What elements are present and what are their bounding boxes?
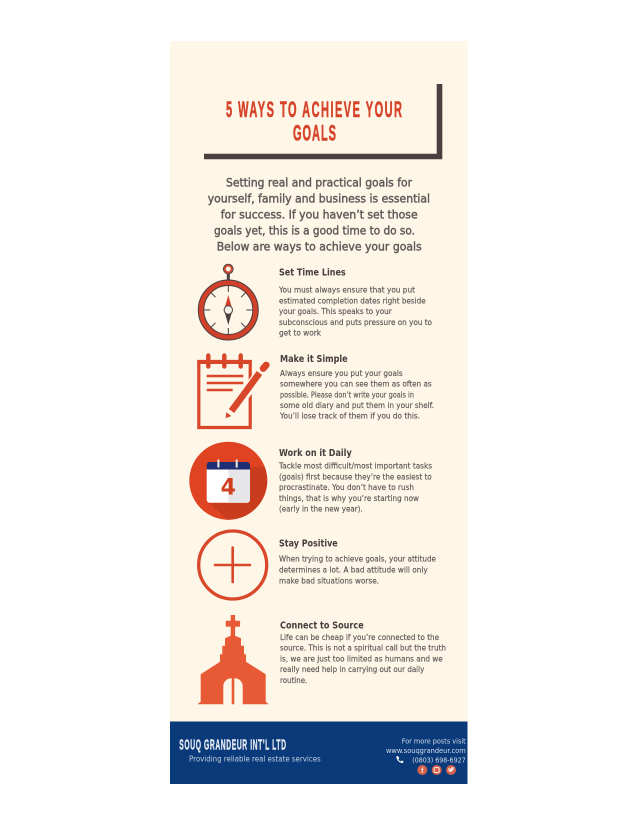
body text: subconscious and puts pressure on you to (279, 318, 432, 327)
intro paragraph: Setting real and practical goals for (226, 176, 412, 190)
corner bracket (204, 84, 442, 159)
body text: somewhere you can see them as often as (280, 380, 432, 389)
icon: compass stopwatch (198, 264, 258, 340)
body text: things, that is why you’re starting now (279, 494, 419, 503)
section: Work on it Daily (278, 448, 432, 514)
section: Stay Positive (279, 539, 436, 585)
icon: phone (396, 756, 404, 763)
body text: source. This is not a spiritual call but the truth (280, 644, 446, 653)
heading: Connect to Source (280, 621, 364, 632)
heading: Work on it Daily (279, 448, 352, 459)
body text: determines a lot. A bad attitude will only (279, 565, 428, 574)
body text: possible. Please don’t write your goals in (280, 390, 414, 399)
body text: some old diary and put them in your shelf. (280, 401, 434, 410)
body text: routine. (280, 676, 307, 685)
body text: When trying to achieve goals, your attitude (279, 555, 436, 564)
body text (278, 461, 432, 514)
social icons: f (421, 766, 424, 775)
body text: estimated completion dates right beside (279, 296, 426, 305)
icon: notepad and pencil (197, 356, 266, 428)
body text: make bad situations worse. (279, 576, 379, 585)
body text: You’ll lose track of them if you do this. (279, 412, 420, 421)
body text: procrastinate. You don’t have to rush (279, 483, 414, 492)
body text: your goals. This speaks to your (279, 307, 392, 316)
body text (278, 286, 432, 338)
company name: SOUQ GRANDEUR INT'L LTD (179, 736, 286, 753)
title second line: GOALS (293, 120, 336, 146)
contact text (386, 736, 466, 764)
body text (279, 369, 434, 421)
title block with corner bracket (204, 84, 442, 159)
icon: church (197, 615, 269, 704)
panel: cream page background (170, 41, 468, 722)
body text: Life can be cheap if you’re connected to the (280, 633, 439, 642)
intro paragraph: yourself, family and business is essential (208, 191, 430, 205)
intro paragraph: for success. If you haven’t set those (221, 207, 418, 221)
heading: Set Time Lines (279, 268, 346, 279)
heading: Stay Positive (279, 539, 338, 550)
body text: is, we are just too limited as humans and we (280, 654, 443, 663)
body text: You must always ensure that you put (278, 286, 415, 295)
social icons (417, 765, 456, 775)
section: Connect to Source (280, 621, 446, 685)
body text: really need help in carrying out our daily (280, 665, 425, 674)
title: 5 WAYS TO ACHIEVE YOUR (226, 97, 402, 122)
tagline: Providing reliable real estate services (189, 755, 321, 764)
footer background (170, 722, 468, 784)
contact text: www.souqgrandeur.com (386, 746, 466, 755)
body text: get to work (279, 329, 322, 338)
icon: plus in circle (199, 531, 267, 599)
contact text: (0803) 698-6927 (412, 755, 466, 764)
icon: calendar badge (189, 442, 267, 520)
body text: (goals) first because they’re the easiest to (279, 472, 432, 481)
intro paragraph: goals yet, this is a good time to do so. (214, 223, 415, 237)
body text: Always ensure you put your goals (280, 369, 403, 378)
heading: Make it Simple (280, 354, 348, 365)
contact text: For more posts visit (402, 736, 466, 745)
intro paragraph: Below are ways to achieve your goals (217, 239, 422, 253)
body text: Tackle most difficult/most important tasks (278, 461, 432, 470)
icon: calendar badge: 4 (221, 476, 236, 500)
panel: footer (170, 722, 468, 784)
intro paragraph (208, 176, 430, 253)
body text (279, 555, 436, 585)
section: Set Time Lines (278, 268, 432, 338)
section: Make it Simple (279, 354, 434, 421)
body text: (early in the new year). (279, 505, 363, 514)
body text (280, 633, 446, 685)
